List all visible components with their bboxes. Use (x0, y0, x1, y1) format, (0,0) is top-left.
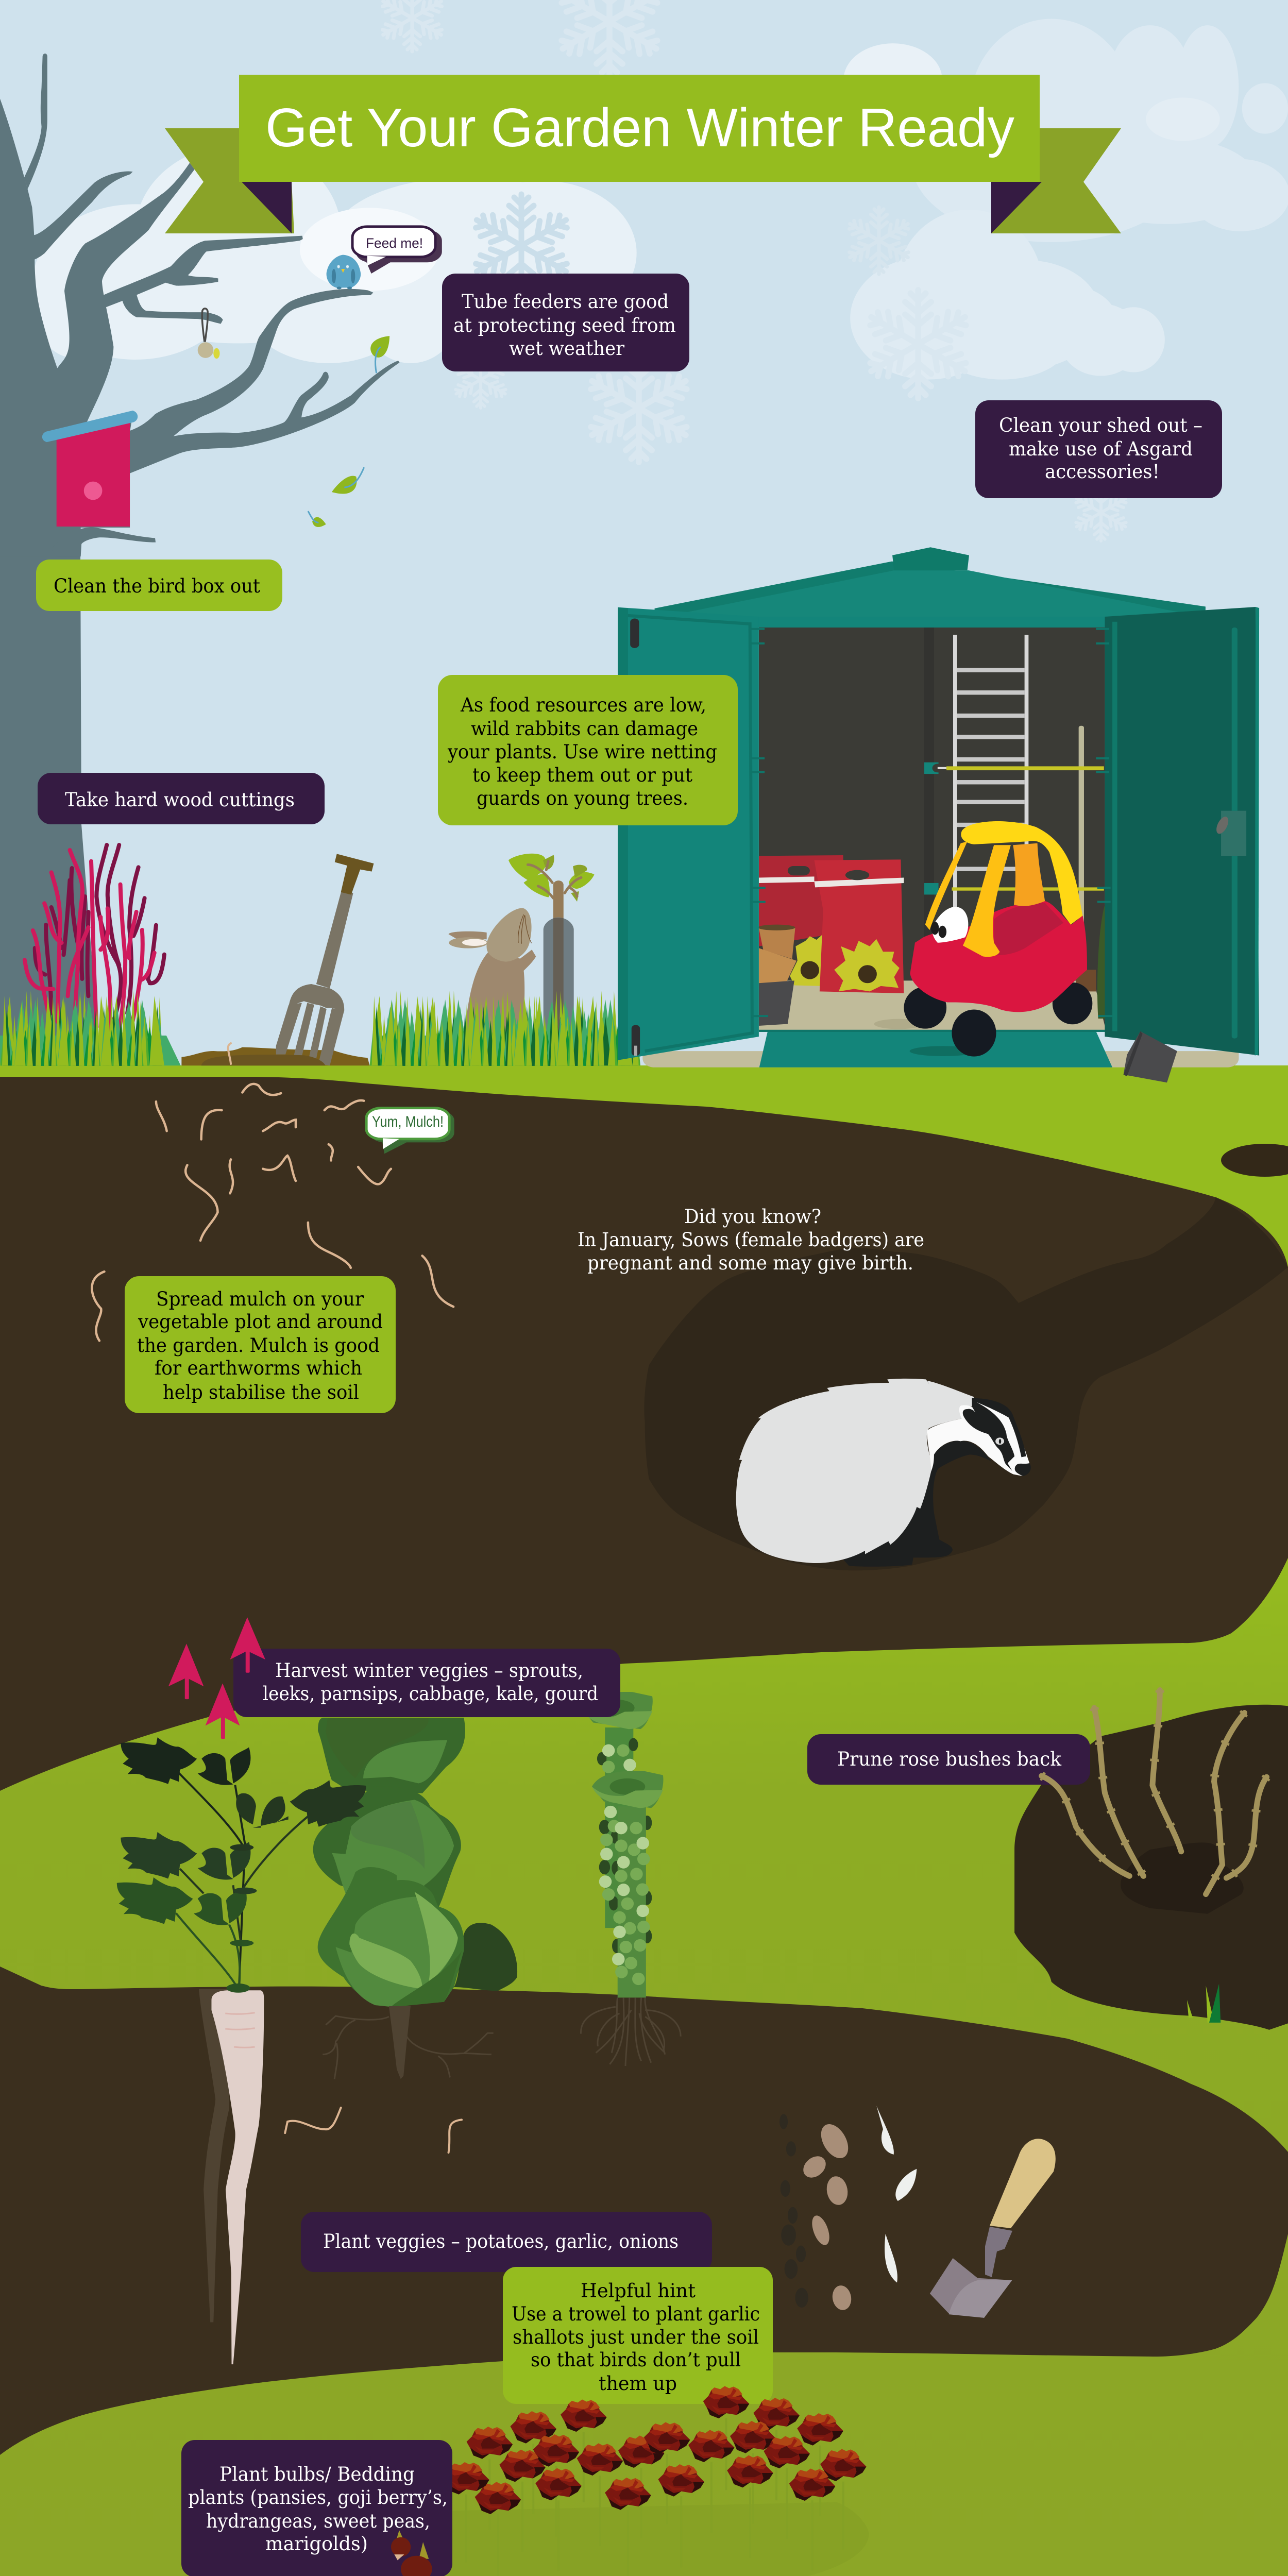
callout: harvest veggies: Harvest winter veggies – sprouts, (275, 1659, 583, 1682)
garlic (876, 2106, 917, 2283)
garden boxes and plant (1076, 970, 1096, 991)
leaves (509, 854, 595, 902)
arrows pointing up (168, 1617, 265, 1739)
door frame head (752, 617, 1107, 628)
concrete base (642, 1051, 1239, 1067)
cabbage (313, 1718, 517, 2007)
callout: spread mulch: help stabilise the soil (163, 1381, 359, 1403)
soil top layer (0, 1077, 1288, 1791)
legs and underside (843, 1441, 992, 1567)
callout: harvest veggies: leeks, parnsips, cabbage, kale, gourd (263, 1683, 598, 1705)
callout: rabbits: wild rabbits can damage (471, 718, 698, 740)
right door (1105, 607, 1259, 1056)
ground strip over shed base (0, 1067, 592, 1082)
Asgard shed (618, 547, 1259, 1082)
speech bubble: yum mulch: Yum, Mulch! (372, 1113, 444, 1130)
sprouts stalk (581, 1692, 663, 1997)
callout: plant bulbs: hydrangeas, sweet peas, (206, 2510, 430, 2532)
title ribbon (165, 75, 1121, 233)
brackets and rods (924, 762, 939, 774)
marigolds (443, 2386, 867, 2576)
text: did you know: In January, Sows (female badgers) are (578, 1229, 924, 1251)
bed shadow (439, 2502, 869, 2576)
fork (276, 854, 374, 1065)
arrow right (230, 1617, 265, 1673)
callout: rabbits (438, 675, 738, 825)
speech bubble: feed me: Feed me! (366, 235, 423, 251)
callout: clean your shed: accessories! (1045, 461, 1160, 483)
callout: hard wood cuttings (38, 773, 325, 824)
body (910, 901, 1087, 1012)
handle (990, 2139, 1056, 2228)
callout: helpful hint: them up (599, 2372, 677, 2395)
speech bubble: feed me (352, 227, 442, 274)
potatoes (799, 2120, 854, 2312)
icon: bluebird (327, 255, 361, 290)
callout: prune roses (807, 1734, 1090, 1785)
callout: spread mulch: vegetable plot and around (138, 1311, 383, 1333)
eyes (932, 907, 968, 943)
ribbon left fold (242, 182, 292, 233)
pruned rose stems (1042, 1690, 1267, 2023)
callout: plant veggies (301, 2212, 712, 2272)
callout: helpful hint: Use a trowel to plant garlic (512, 2303, 760, 2325)
icon: trowel (930, 2139, 1056, 2318)
callout: bird box: Clean the bird box out (54, 575, 260, 597)
callout: spread mulch (125, 1276, 396, 1413)
wheels (904, 987, 946, 1029)
dogwood red stems (25, 845, 164, 1030)
text: did you know (578, 1206, 924, 1274)
callout: tube feeders: at protecting seed from (453, 314, 676, 336)
worms in soil (92, 1084, 453, 1341)
onion seeds and garlic (779, 2106, 917, 2308)
bed soil (1014, 1705, 1288, 2030)
callout: clean your shed: make use of Asgard (1009, 438, 1193, 460)
text: did you know: pregnant and some may give birth. (587, 1252, 913, 1274)
callout: helpful hint (503, 2267, 773, 2404)
callout: prune roses: Prune rose bushes back (837, 1748, 1062, 1770)
callout: rabbits: guards on young trees. (477, 787, 688, 809)
front pillars (963, 845, 1011, 957)
neck (985, 2227, 1012, 2277)
cloud middle right (850, 210, 1165, 380)
icon: falling leaves (308, 336, 389, 527)
icon: hanging seed feeder (198, 309, 220, 359)
inner mound (201, 1055, 325, 1065)
rose bed (1014, 1705, 1288, 2030)
small left branch (24, 172, 133, 262)
floor (759, 980, 1106, 1031)
callout: tube feeders: wet weather (509, 337, 624, 360)
rear pillar (1013, 843, 1045, 906)
callout: plant veggies: Plant veggies – potatoes, garlic, onions (323, 2230, 679, 2252)
badger (736, 1379, 1031, 1567)
callout: plant bulbs: plants (pansies, goji berry’s, (188, 2486, 448, 2509)
worm on mound (228, 1043, 231, 1064)
threshold (759, 1031, 1112, 1067)
callout: clean your shed: Clean your shed out – (999, 414, 1202, 436)
badger burrow (644, 1197, 1288, 1570)
callout: spread mulch: Spread mulch on your (156, 1288, 364, 1310)
hole (1121, 1842, 1244, 1914)
callout: rabbits: As food resources are low, (460, 694, 706, 716)
callout: bird box (36, 560, 282, 611)
front compost bag (814, 859, 904, 993)
sprouts roots (581, 1997, 681, 2066)
sky background (0, 0, 1288, 1082)
ribbon right fold (991, 182, 1042, 233)
callout: tube feeders: Tube feeders are good (462, 291, 669, 313)
twigs (528, 861, 581, 898)
flower pots (758, 925, 796, 1026)
ladder (953, 635, 1028, 931)
head stripes (963, 1398, 1026, 1471)
middle branches (100, 236, 303, 324)
snowflakes (379, 0, 1129, 541)
cloud behind tree (33, 145, 637, 363)
toy car (904, 821, 1092, 1057)
callout: tube feeders (442, 274, 689, 371)
white head and neck (927, 1398, 1029, 1476)
cabbage root (389, 2006, 411, 2079)
shed interior (759, 628, 1105, 1031)
callout: harvest veggies (233, 1649, 620, 1717)
speech bubble: yum mulch (366, 1108, 454, 1154)
bright cloud behind bird (300, 208, 439, 291)
callout: helpful hint: so that birds don’t pull (531, 2349, 741, 2371)
nose (1015, 1463, 1031, 1476)
tall top branch (24, 54, 47, 189)
rabbit (449, 908, 536, 1047)
pole (1079, 726, 1084, 982)
grass clump right (369, 991, 640, 1066)
callout: helpful hint: shallots just under the soil (513, 2326, 759, 2348)
lower worms (285, 2108, 462, 2153)
callout: rabbits: to keep them out or put (472, 764, 692, 786)
roof (961, 821, 1082, 925)
ground base (0, 1065, 1288, 2576)
lower trunk (0, 551, 100, 1065)
callout: spread mulch: the garden. Mulch is good (137, 1334, 380, 1357)
marigold stems (466, 2418, 843, 2576)
ribbon right tail (991, 128, 1121, 233)
tree (0, 54, 400, 1065)
vegetables (117, 1692, 681, 2364)
grass clump left (0, 991, 181, 1066)
ribbon main (239, 75, 1040, 182)
trunk (553, 880, 564, 918)
clouds (33, 19, 1288, 380)
tree guard (544, 918, 574, 1065)
back compost bag (759, 855, 845, 946)
icon: bulbs (391, 2530, 432, 2576)
seat (994, 903, 1063, 955)
tipped pot (1124, 1031, 1177, 1082)
callout: plant bulbs: marigolds) (265, 2533, 368, 2555)
parsnip shadow (199, 1989, 229, 2322)
mole hole (1221, 1144, 1288, 1177)
dirt mound and garden fork (181, 854, 374, 1065)
soil lower layer (0, 1967, 1288, 2455)
icon: bird box (42, 411, 138, 527)
roof (655, 562, 1206, 617)
flower bed (439, 2502, 869, 2576)
callout: hard wood cuttings: Take hard wood cuttings (65, 789, 295, 811)
body (736, 1379, 974, 1563)
trunk and main branches (0, 99, 400, 556)
ribbon left tail (165, 128, 294, 233)
branch under bird box (51, 528, 156, 556)
front wheel (952, 1009, 996, 1057)
callout: helpful hint: Helpful hint (581, 2280, 696, 2302)
title: Get Your Garden Winter Ready (265, 97, 1014, 158)
young tree with guard (509, 854, 595, 1065)
parsnip leaves (117, 1737, 366, 1993)
text: did you know: Did you know? (684, 1206, 821, 1228)
back sunflower (790, 935, 822, 986)
callout: clean your shed (975, 400, 1222, 498)
hinges (751, 629, 1112, 1016)
callout: plant bulbs: Plant bulbs/ Bedding (219, 2463, 415, 2485)
blade (930, 2258, 1012, 2318)
callout: plant bulbs (181, 2440, 452, 2576)
callout: spread mulch: for earthworms which (155, 1357, 362, 1379)
arrow centre (206, 1683, 240, 1739)
onion seeds (779, 2114, 808, 2308)
arrow left (168, 1643, 204, 1699)
callout: rabbits: your plants. Use wire netting (447, 741, 717, 763)
eye (995, 1437, 1004, 1445)
parsnip root (211, 1990, 264, 2364)
cloud top right (843, 19, 1288, 242)
mound (181, 1047, 369, 1065)
left door (618, 607, 759, 1060)
